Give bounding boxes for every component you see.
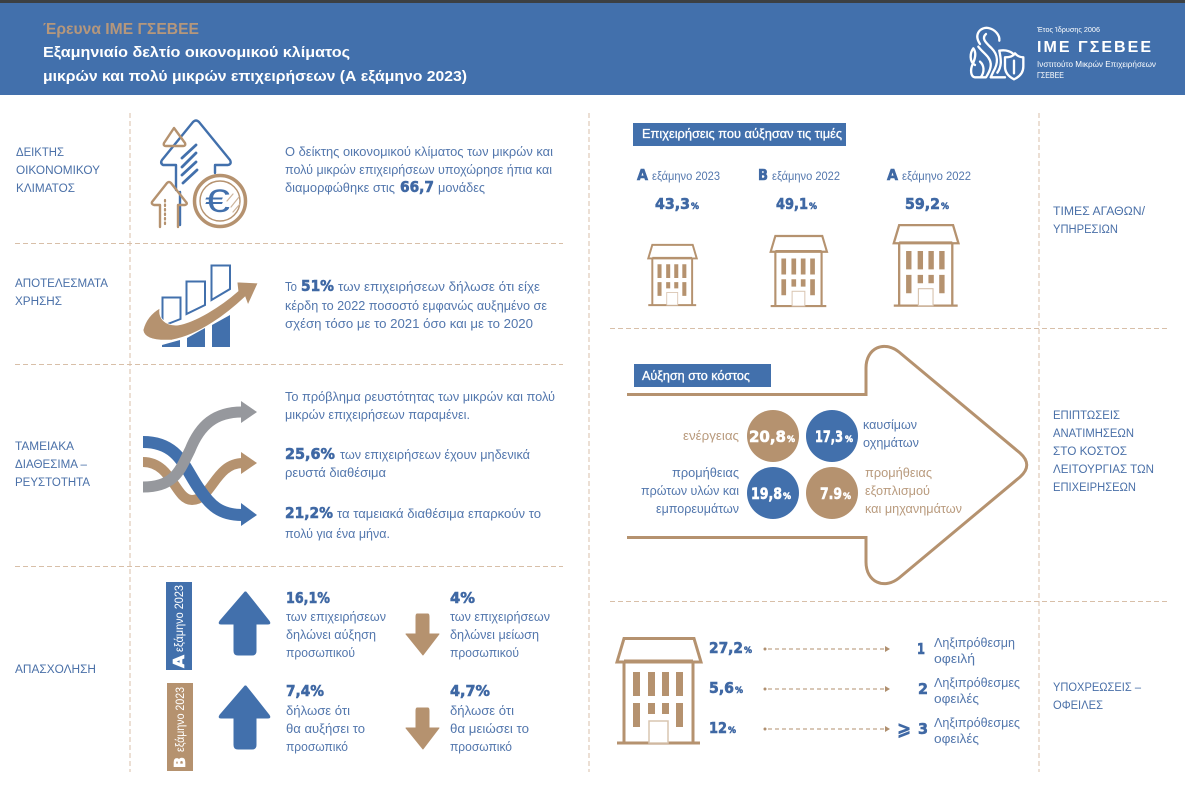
column: A semester 2022: % — [941, 202, 949, 212]
row: 12% three or more overdue debts: οφειλές — [934, 732, 979, 746]
heading: businesses that raised prices: Επιχειρήσεις που αύξησαν τις τιμές — [642, 127, 842, 141]
label: raw materials and goods — [641, 466, 739, 516]
stat: 7,4% will increase: δήλωσε ότι — [286, 704, 350, 718]
text: climate index: Ο δείκτης οικονομικού κλίματος των μικρών και — [285, 145, 553, 159]
icon: rising arrows and euro coin — [152, 120, 246, 227]
row: 27,2% one overdue debt: % — [744, 646, 752, 656]
heading: cost increase: Αύξηση στο κόστος — [642, 369, 750, 383]
label: equipment and machinery: προμήθειας — [865, 466, 932, 480]
row: 12% three or more overdue debts: ⩾ — [897, 719, 911, 740]
stat: 4,7% will decrease: 4,7% — [450, 682, 490, 700]
label: cash and liquidity — [15, 441, 90, 489]
circle: 19,8%: 19,8 — [751, 484, 782, 503]
text: liquidity: των επιχειρήσεων έχουν μηδενικά — [340, 448, 530, 462]
label: economic climate index — [16, 147, 100, 195]
row: 12% three or more overdue debts: 12 — [709, 719, 727, 737]
label: employment: ΑΠΑΣΧΟΛΗΣΗ — [15, 664, 96, 676]
stat: 7,4% will increase: θα αυξήσει το — [286, 722, 365, 736]
label: impact of price rises: ΣΤΟ ΚΟΣΤΟΣ — [1053, 446, 1127, 458]
tag: B semester 2023: Β — [171, 757, 189, 768]
icon: building for debts — [617, 638, 701, 743]
logo text: ΓΣΕΒΕΕ — [1037, 71, 1064, 80]
circle: 20,8%: 20,8 — [749, 427, 786, 446]
column: A semester 2022: 59,2 — [905, 195, 940, 213]
text: climate index: 66,7 — [400, 178, 434, 196]
column: B semester 2022: % — [809, 202, 817, 212]
row: 5,6% two overdue debts: 2 — [918, 680, 928, 698]
label: obligations and debts: ΟΦΕΙΛΕΣ — [1053, 700, 1103, 712]
text: results: Το — [285, 280, 297, 294]
stat: 4% decrease: δηλώνει μείωση — [450, 628, 539, 642]
circle: 17,3% — [806, 410, 858, 462]
label: impact of price rises — [1053, 410, 1154, 494]
text: liquidity: Το πρόβλημα ρευστότητας των μικρών και πολύ — [285, 390, 555, 404]
text: results: κέρδη το 2022 ποσοστό εμφανώς αυξημένο σε — [285, 299, 547, 313]
label: results of use: ΑΠΟΤΕΛΕΣΜΑΤΑ — [15, 278, 108, 290]
stat: 4% decrease — [450, 589, 550, 660]
label: economic climate index: ΔΕΙΚΤΗΣ — [16, 147, 64, 159]
header title: Έρευνα ΙΜΕ ΓΣΕΒΕΕ — [43, 21, 199, 38]
row: 12% three or more overdue debts: % — [728, 726, 736, 736]
tag: A semester 2023: Α — [170, 655, 188, 668]
label: economic climate index: ΚΛΙΜΑΤΟΣ — [16, 183, 75, 195]
column: B semester 2022 — [758, 166, 840, 213]
stat: 4,7% will decrease: προσωπικό — [450, 740, 512, 754]
row: 5,6% two overdue debts — [709, 676, 1020, 706]
row: 12% three or more overdue debts — [709, 716, 1020, 746]
circle: 20,8%: % — [787, 435, 795, 445]
label: vehicle fuels: καυσίμων — [863, 418, 917, 432]
row: 5,6% two overdue debts: Ληξιπρόθεσμες — [934, 676, 1020, 690]
label: energy: ενέργειας — [683, 429, 739, 443]
text: results — [285, 277, 547, 331]
heading: cost increase — [634, 364, 771, 387]
text: results: σχέση τόσο με το 2021 όσο και με το 2020 — [285, 317, 533, 331]
circle: 20,8% — [747, 410, 799, 462]
stat: 4% decrease: των επιχειρήσεων — [450, 610, 550, 624]
stat: 7,4% will increase: 7,4% — [286, 682, 324, 700]
row: 27,2% one overdue debt — [709, 636, 1015, 666]
label: cash and liquidity: ΡΕΥΣΤΟΤΗΤΑ — [15, 477, 90, 489]
row: 27,2% one overdue debt: Ληξιπρόθεσμη — [934, 636, 1015, 650]
text: climate index: μονάδες — [438, 181, 485, 195]
label: impact of price rises: ΕΠΙΠΤΩΣΕΙΣ — [1053, 410, 1120, 422]
text: liquidity: 21,2% — [285, 504, 333, 522]
row: 27,2% one overdue debt: οφειλή — [934, 652, 975, 666]
row: 27,2% one overdue debt: 27,2 — [709, 639, 743, 657]
label: raw materials and goods: εμπορευμάτων — [656, 502, 739, 516]
text: liquidity: μικρών επιχειρήσεων παραμένει. — [285, 408, 470, 422]
icon: lion logo with shield — [971, 28, 1023, 79]
tag: A semester 2023: εξάμηνο 2023 — [174, 585, 186, 652]
stat: 7,4% will increase: προσωπικό — [286, 740, 348, 754]
stat: 4% decrease: 4% — [450, 589, 475, 607]
text: liquidity: ρευστά διαθέσιμα — [285, 466, 386, 480]
header band — [0, 3, 1185, 95]
label: equipment and machinery — [865, 466, 962, 516]
text: liquidity: τα ταμειακά διαθέσιμα επαρκούν το — [337, 507, 541, 521]
stat: 4,7% will decrease: θα μειώσει το — [450, 722, 529, 736]
stat: 16,1% increase: δηλώνει αύξηση — [286, 628, 376, 642]
text: results: 51% — [301, 277, 334, 295]
label: vehicle fuels: οχημάτων — [863, 436, 919, 450]
row: 5,6% two overdue debts: 5,6 — [709, 679, 734, 697]
icon: down arrow B — [406, 708, 439, 749]
text: liquidity: 25,6% — [285, 445, 335, 463]
icon: down arrow A — [406, 614, 439, 655]
logo text: Ινστιτούτο Μικρών Επιχειρήσεων — [1037, 60, 1156, 69]
row: 27,2% one overdue debt: 1 — [917, 640, 925, 658]
column: B semester 2022: εξάμηνο 2022 — [772, 171, 840, 183]
row: 12% three or more overdue debts: 3 — [918, 720, 928, 738]
stat: 16,1% increase — [286, 589, 386, 660]
label: impact of price rises: ΕΠΙΧΕΙΡΗΣΕΩΝ — [1053, 482, 1136, 494]
label: equipment and machinery: εξοπλισμού — [865, 484, 930, 498]
text: climate index — [285, 145, 553, 196]
arrow outline: cost increase — [627, 346, 1027, 584]
row: 5,6% two overdue debts: οφειλές — [934, 692, 979, 706]
heading: businesses that raised prices — [633, 123, 846, 146]
label: obligations and debts: ΥΠΟΧΡΕΩΣΕΙΣ – — [1053, 682, 1142, 694]
stat: 4,7% will decrease: δήλωσε ότι — [450, 704, 514, 718]
label: impact of price rises: ΛΕΙΤΟΥΡΓΙΑΣ ΤΩΝ — [1053, 464, 1154, 476]
circle: 17,3%: % — [845, 435, 853, 445]
stat: 16,1% increase: 16,1% — [286, 589, 330, 607]
label: prices of goods and services: ΤΙΜΕΣ ΑΓΑΘΩΝ/ — [1053, 206, 1146, 218]
column: B semester 2022: Β — [758, 166, 768, 184]
label: obligations and debts — [1053, 682, 1142, 712]
label: vehicle fuels — [863, 418, 919, 450]
column: A semester 2023: Α — [637, 166, 648, 184]
stat: 7,4% will increase — [286, 682, 365, 754]
stat: 16,1% increase: των επιχειρήσεων — [286, 610, 386, 624]
label: raw materials and goods: πρώτων υλών και — [641, 484, 739, 498]
stat: 4,7% will decrease — [450, 682, 529, 754]
column: A semester 2022: Α — [887, 166, 898, 184]
label: economic climate index: ΟΙΚΟΝΟΜΙΚΟΥ — [16, 165, 100, 177]
stat: 16,1% increase: προσωπικού — [286, 646, 355, 660]
text: results: των επιχειρήσεων δήλωσε ότι είχε — [338, 280, 540, 294]
column: A semester 2022 — [887, 166, 971, 213]
text: liquidity: πολύ για ένα μήνα. — [285, 527, 390, 541]
icon: growth bars with swoosh arrow — [143, 266, 258, 347]
logo text — [1036, 25, 1156, 80]
column: B semester 2022: 49,1 — [776, 195, 808, 213]
label: cash and liquidity: ΔΙΑΘΕΣΙΜΑ – — [15, 459, 88, 471]
label: results of use — [15, 278, 108, 308]
tag: B semester 2023: εξάμηνο 2023 — [175, 687, 187, 752]
circle: 7.9% — [806, 467, 858, 519]
label: raw materials and goods: προμήθειας — [672, 466, 739, 480]
header title — [43, 21, 467, 85]
circle: 17,3%: 17,3 — [815, 427, 843, 446]
label: prices of goods and services — [1053, 206, 1146, 236]
column: A semester 2023: εξάμηνο 2023 — [652, 171, 720, 183]
circle: 7.9%: % — [843, 492, 851, 502]
icon: euro sign: € — [205, 183, 230, 219]
column: A semester 2023: % — [691, 202, 699, 212]
icon: up arrow A — [219, 592, 270, 655]
text: climate index: πολύ μικρών επιχειρήσεων υποχώρησε ήπια και — [285, 163, 552, 177]
icon: building small — [648, 245, 697, 305]
text: liquidity — [285, 390, 555, 541]
stat: 4% decrease: προσωπικού — [450, 646, 519, 660]
label: equipment and machinery: και μηχανημάτων — [865, 502, 962, 516]
circle: 7.9%: 7.9 — [820, 484, 842, 503]
logo text: ΙΜΕ ΓΣΕΒΕΕ — [1037, 39, 1151, 56]
row: 5,6% two overdue debts: % — [735, 686, 743, 696]
column: A semester 2023 — [637, 166, 720, 213]
tag: B semester 2023 — [167, 683, 193, 771]
column: A semester 2023: 43,3 — [655, 195, 690, 213]
icon: building medium — [771, 236, 827, 306]
icon: up arrow B — [219, 686, 270, 749]
tag: A semester 2023 — [166, 582, 192, 670]
row: 12% three or more overdue debts: Ληξιπρόθεσμες — [934, 716, 1020, 730]
label: impact of price rises: ΑΝΑΤΙΜΗΣΕΩΝ — [1053, 428, 1134, 440]
header title: μικρών και πολύ μικρών επιχειρήσεων (Α εξάμηνο 2023) — [43, 68, 467, 85]
column: A semester 2022: εξάμηνο 2022 — [902, 171, 971, 183]
header title: Εξαμηνιαίο δελτίο οικονομικού κλίματος — [43, 44, 350, 61]
label: prices of goods and services: ΥΠΗΡΕΣΙΩΝ — [1053, 224, 1118, 236]
icon: building large — [894, 225, 958, 306]
logo text: Έτος Ίδρυσης 2006 — [1036, 25, 1100, 34]
text: climate index: διαμορφώθηκε στις — [285, 181, 395, 195]
label: cash and liquidity: ΤΑΜΕΙΑΚΑ — [15, 441, 74, 453]
circle: 19,8%: % — [783, 492, 791, 502]
circle: 19,8% — [747, 467, 799, 519]
icon: crossing arrows — [143, 401, 257, 526]
label: results of use: ΧΡΗΣΗΣ — [15, 296, 62, 308]
